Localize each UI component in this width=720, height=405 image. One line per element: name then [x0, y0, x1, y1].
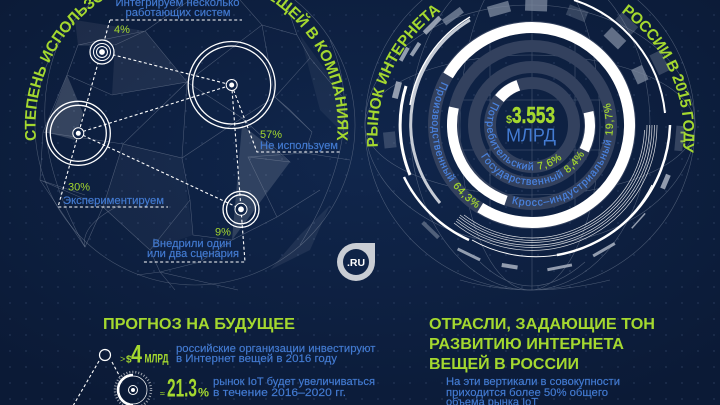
ring label: consumer: Потребительский 7,6%: [484, 102, 562, 170]
circle: 57%: [188, 42, 275, 128]
total: 3.553 billion: МЛРД: [506, 126, 556, 146]
label: 57% not used: Не используем: [260, 140, 338, 152]
label: 30% experimenting: 30%: [68, 182, 90, 194]
circle: 30%: [46, 101, 110, 165]
stat: 4 billion: $: [126, 355, 132, 366]
left globe wireframe: [35, 0, 355, 290]
decorative outer segments: [383, 0, 684, 271]
logo: .RU: [347, 257, 365, 269]
stat: 4 billion: 4: [131, 341, 142, 369]
stat: 21.3%: %: [198, 386, 209, 400]
heading: IoT market: [366, 4, 694, 153]
total: 3.553 billion: 3.553: [512, 102, 555, 128]
chart: network of usage circles: [46, 20, 340, 262]
ring label: cross-industry: Кросс–индустриальный 19,7%: [512, 104, 614, 208]
label: 4% integrate several systems: 4%: [114, 24, 130, 36]
label: 9% one or two scenarios: [147, 226, 239, 260]
stat: 21.3%: ≈: [160, 389, 165, 399]
label: 4% integrate several systems: [114, 0, 240, 36]
ring label: government: Государственный 8,4%: [481, 152, 584, 186]
text: organisations invest: в Интернет вещей в 2016 году: [176, 353, 338, 365]
logo: [337, 243, 375, 281]
text: organisations invest: [176, 343, 376, 365]
heading: sectors setting the tone: ОТРАСЛИ, ЗАДАЮЩИЕ ТОН: [429, 316, 655, 333]
chart: concentric market rings: [383, 0, 684, 272]
heading: sectors setting the tone: РАЗВИТИЮ ИНТЕРНЕТА: [429, 336, 624, 353]
label: 30% experimenting: Экспериментируем: [63, 195, 164, 207]
stat: 21.3%: 21.3: [167, 375, 197, 403]
circle: 9%: [223, 191, 259, 227]
text: verticals share: приходится более 50% общего: [446, 387, 608, 399]
label: 9% one or two scenarios: Внедрили один: [152, 238, 232, 250]
text: verticals share: На эти вертикали в совокупности: [446, 376, 620, 388]
heading: forecast: ПРОГНОЗ НА БУДУЩЕЕ: [103, 316, 295, 333]
grey ring tracks: [434, 27, 630, 223]
total: 3.553 billion: $: [506, 114, 512, 126]
heading: sectors setting the tone: [429, 316, 655, 373]
total: 3.553 billion: [506, 102, 556, 146]
stat: 4 billion: [120, 341, 169, 369]
label: 9% one or two scenarios: 9%: [215, 226, 231, 238]
heading: IoT market: РЫНОК ИНТЕРНЕТА: [366, 5, 440, 146]
white data arcs: [448, 28, 630, 223]
right globe wireframe: [365, 0, 695, 290]
heading: IoT market: РОССИИ В 2015 ГОДУ: [622, 4, 694, 153]
label: 57% not used: 57%: [260, 129, 282, 141]
label: 30% experimenting: [63, 182, 164, 207]
label: 57% not used: [260, 129, 338, 152]
ring label: production: Производственный 64,3%: [430, 82, 480, 208]
text: verticals share: [446, 376, 620, 405]
label: 9% one or two scenarios: или два сценария: [147, 248, 239, 260]
text: market growth: [213, 376, 375, 399]
text: market growth: в течение 2016–2020 гг.: [213, 387, 346, 399]
circle: 4%: [90, 40, 114, 64]
stat: 4 billion: МЛРД: [144, 352, 169, 366]
text: market growth: рынок IoT будет увеличиваться: [213, 376, 375, 388]
text: organisations invest: российские организации инвестируют: [176, 343, 376, 355]
heading: sectors setting the tone: ВЕЩЕЙ В РОССИИ: [429, 354, 579, 373]
label: 4% integrate several systems: работающих систем: [126, 7, 230, 19]
stat: 4 billion: >: [120, 354, 125, 364]
icons: forecast timeline: [74, 350, 151, 405]
